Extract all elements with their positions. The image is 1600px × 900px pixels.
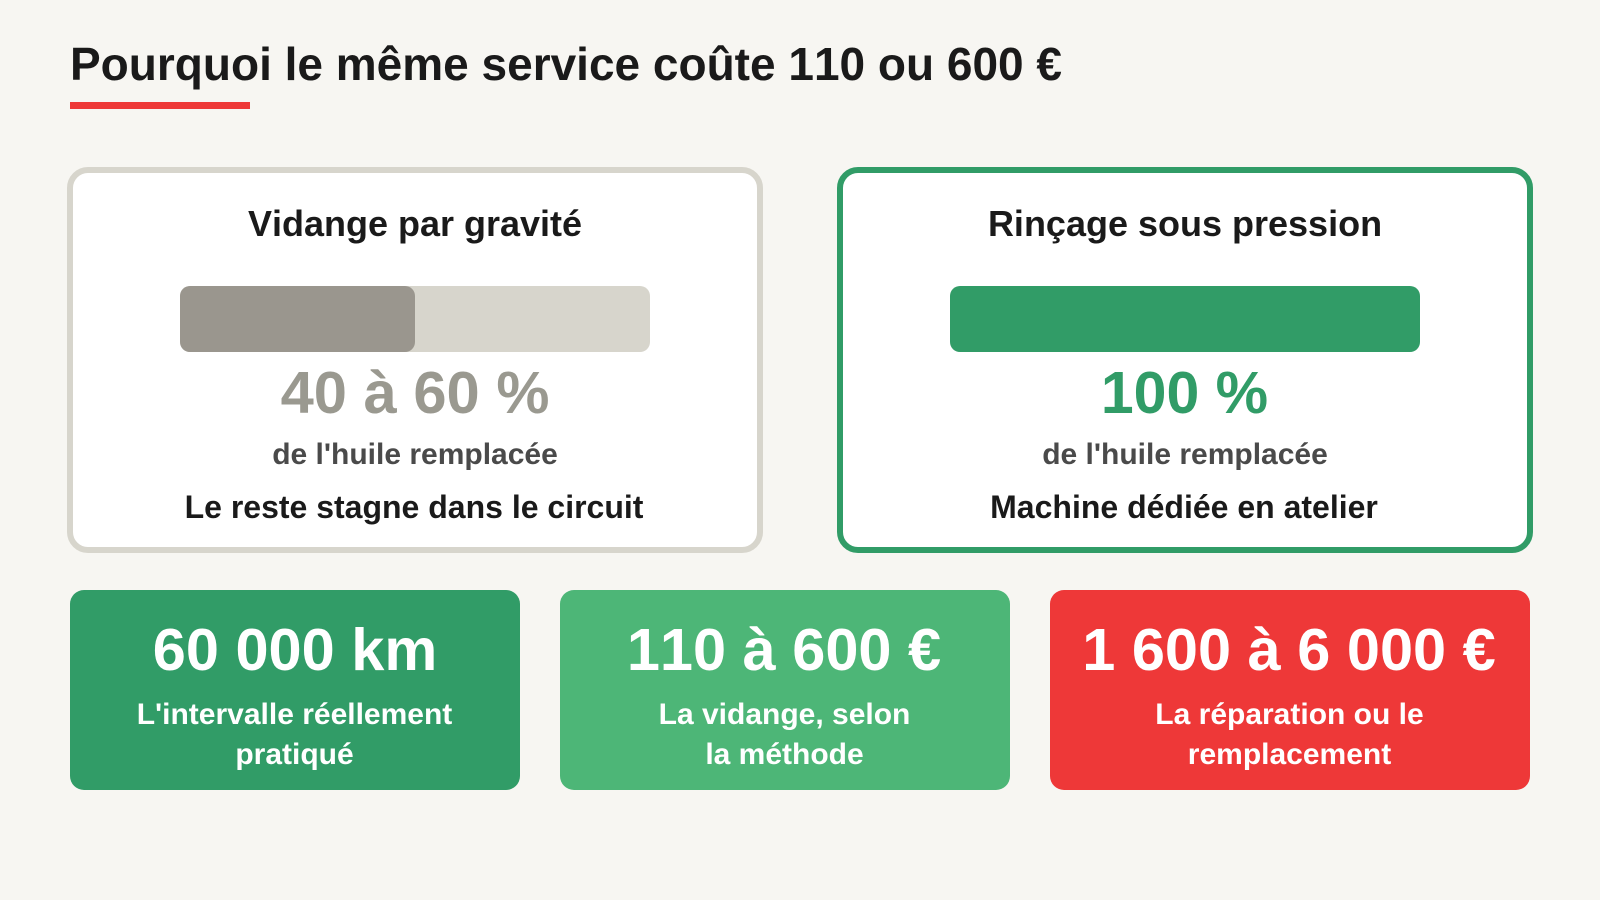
panel frame bbox=[840, 170, 1530, 550]
stat caption: La réparation ou le bbox=[1155, 698, 1424, 731]
stat caption: pratiqué bbox=[235, 738, 354, 771]
stat caption: L'intervalle réellement bbox=[137, 698, 452, 731]
panel frame bbox=[70, 170, 760, 550]
stat caption: remplacement bbox=[1188, 738, 1391, 771]
panel note: Le reste stagne dans le circuit bbox=[185, 489, 644, 525]
panel heading: Rinçage sous pression bbox=[988, 203, 1382, 244]
stat caption: La vidange, selon bbox=[659, 698, 910, 731]
panel note: Machine dédiée en atelier bbox=[990, 489, 1378, 525]
stat card: réparation bbox=[1050, 590, 1530, 790]
percentage value: 100 % bbox=[1101, 360, 1268, 426]
percentage caption: de l'huile remplacée bbox=[272, 438, 558, 471]
stat card: prix vidange bbox=[560, 590, 1010, 790]
stat card: intervalle bbox=[70, 590, 520, 790]
progress bar 40 à 60 % bbox=[180, 286, 650, 352]
percentage caption: de l'huile remplacée bbox=[1042, 438, 1328, 471]
panel heading: Vidange par gravité bbox=[248, 203, 582, 244]
title underline bbox=[70, 102, 250, 109]
panel: rinçage sous pression bbox=[840, 170, 1530, 550]
title: Pourquoi le même service coûte 110 ou 600 € bbox=[70, 38, 1062, 90]
panel: vidange par gravité bbox=[70, 170, 760, 550]
stat value: 1 600 à 6 000 € bbox=[1082, 616, 1496, 683]
stat value: 60 000 km bbox=[153, 616, 437, 683]
title block bbox=[70, 38, 1062, 109]
stat caption: la méthode bbox=[705, 738, 864, 771]
percentage value: 40 à 60 % bbox=[281, 359, 549, 426]
progress bar 100 % bbox=[950, 286, 1420, 352]
stat value: 110 à 600 € bbox=[627, 616, 941, 683]
